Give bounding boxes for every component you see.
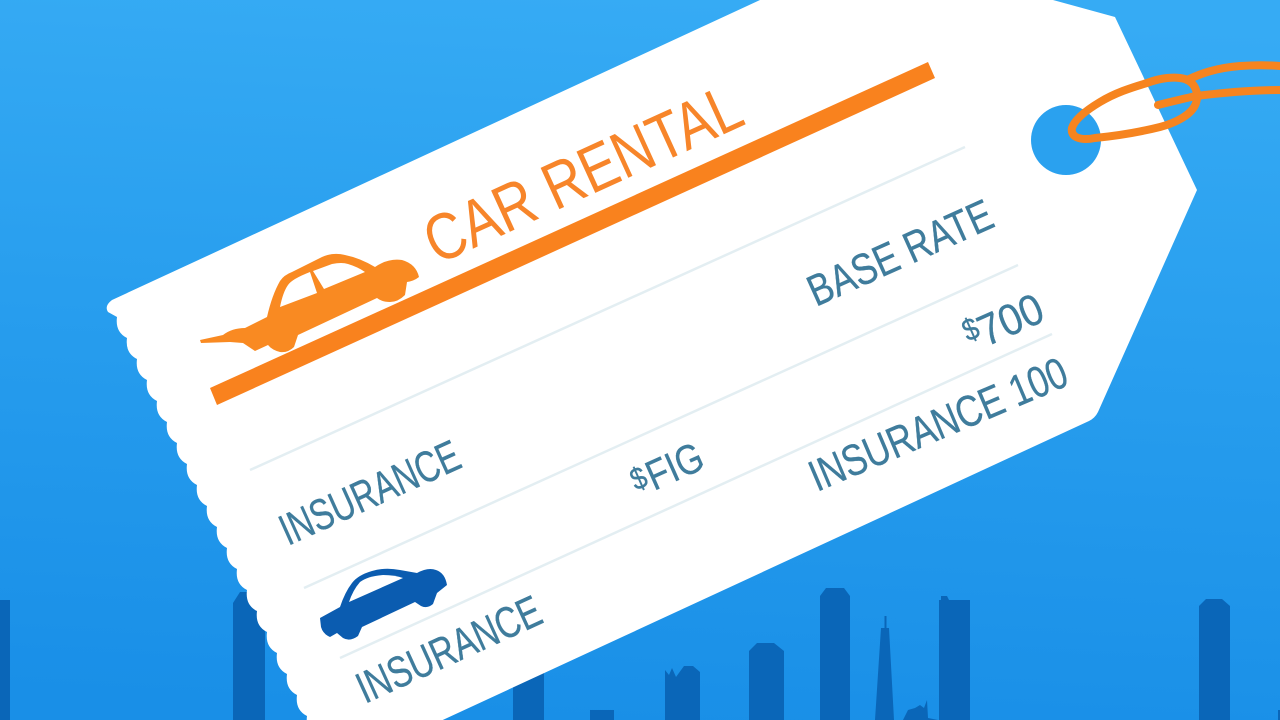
string strand lower	[1158, 90, 1280, 105]
orange header bar	[210, 62, 935, 405]
icon: blue car	[320, 569, 447, 640]
icon: orange car	[200, 254, 419, 352]
label: insurance: INSURANCE	[272, 431, 468, 555]
value: $700: $	[957, 310, 985, 348]
label: insurance 100: INSURANCE 100	[802, 348, 1075, 501]
label: base rate: BASE RATE	[800, 190, 1001, 316]
value: $700: 700	[970, 284, 1051, 356]
city skyline	[0, 588, 1280, 720]
tag hole	[1031, 105, 1101, 175]
value: $fig: $	[625, 459, 653, 497]
value: $fig: FIG	[639, 433, 711, 499]
value: $fig	[625, 433, 711, 499]
string loop	[1072, 65, 1280, 139]
string strand upper	[1187, 65, 1280, 80]
label: insurance lower: INSURANCE	[349, 586, 549, 713]
title: car rental: CAR RENTAL	[412, 69, 753, 278]
ruled lines	[250, 147, 1052, 658]
